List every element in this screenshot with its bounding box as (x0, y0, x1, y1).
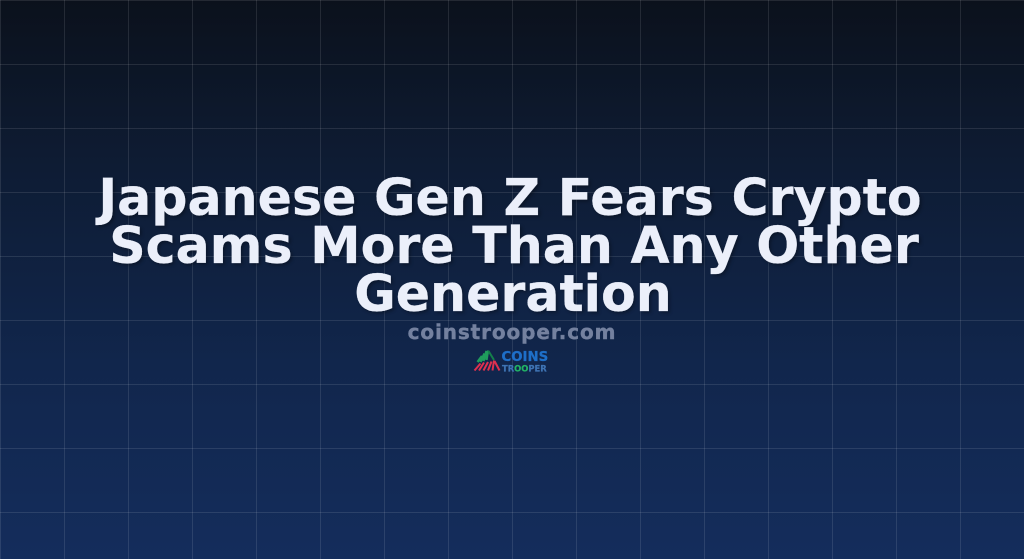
wordmark: COINS: COINS (502, 350, 548, 365)
title (95, 168, 922, 323)
logo: Coins Trooper (474, 350, 548, 374)
website label: coinstrooper.com (408, 320, 616, 344)
title: Scams More Than Any Other (109, 216, 919, 275)
title: Generation (354, 264, 672, 323)
wordmark: TROOPER: TROOPER (502, 364, 547, 374)
icon: mountain chart mark (474, 350, 500, 370)
title: Japanese Gen Z Fears Crypto (98, 168, 922, 227)
